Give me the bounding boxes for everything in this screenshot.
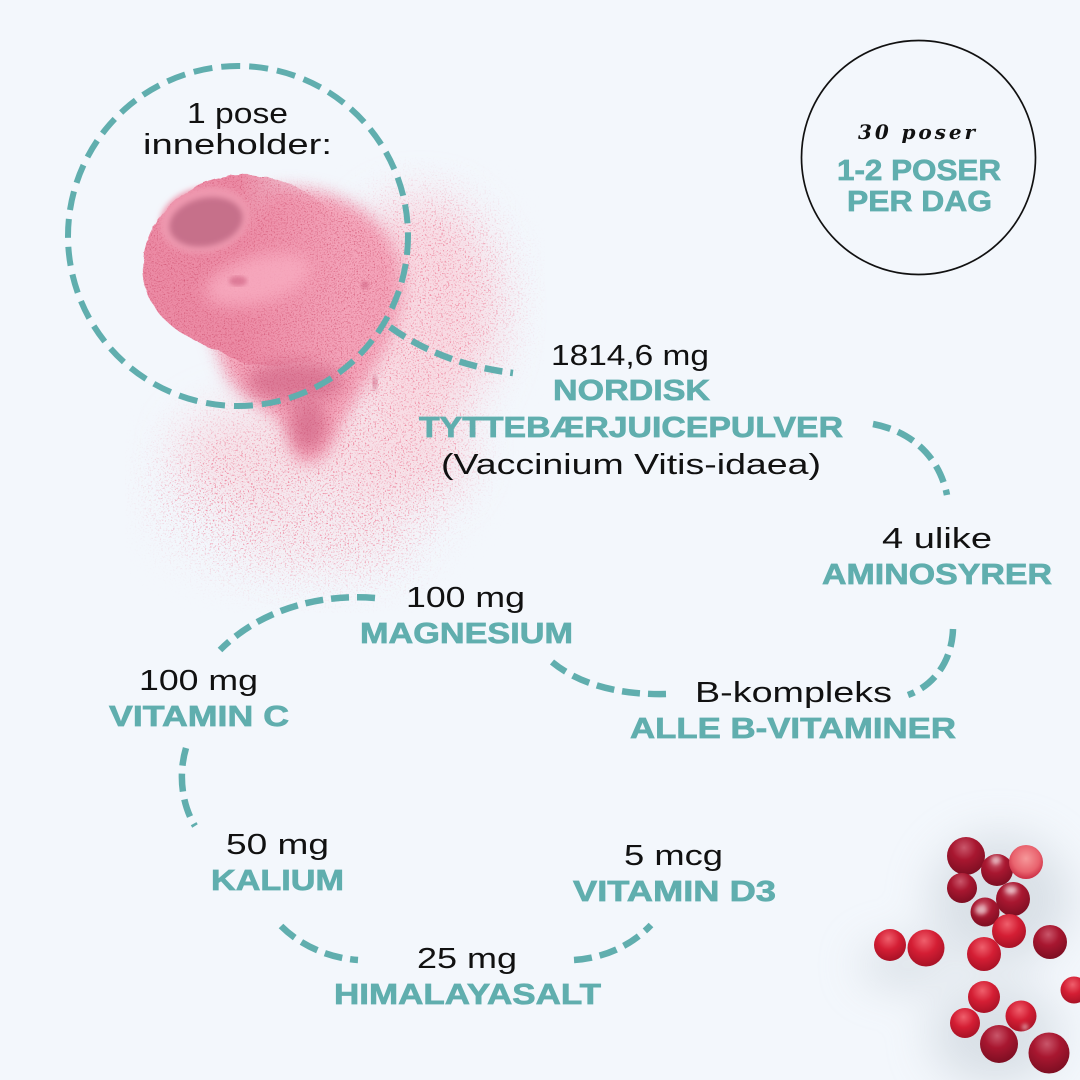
ingredient: potassium: KALIUM [211,865,344,897]
ingredient: magnesium [360,582,573,650]
lingonberries photo [860,835,1080,1080]
ingredient: magnesium: 100 mg [406,582,525,614]
arrow: B-complex to magnesium [552,662,666,694]
ingredient: himalayan salt: HIMALAYASALT [334,979,601,1011]
ingredient: vitamin D3: 5 mcg [624,840,723,872]
dosage badge: 1-2 POSER [837,155,1001,187]
ingredient: B vitamins: B-kompleks [695,677,892,709]
ingredient: lingonberry [419,340,843,481]
heading: 1 pose inneholder: inneholder: [143,129,332,161]
arrow: potassium to salt [281,926,358,960]
ingredient: B vitamins [630,677,956,745]
ingredient: vitamin D3 [573,840,776,908]
ingredient: potassium [211,829,344,897]
ingredient: lingonberry: 1814,6 mg [551,340,709,372]
ingredient: vitamin D3: VITAMIN D3 [573,876,776,908]
ingredient: vitamin C: 100 mg [139,665,258,697]
ingredient: amino acids: 4 ulike [882,523,992,555]
ingredient: potassium: 50 mg [226,829,329,861]
ingredient: himalayan salt [334,943,601,1011]
berry shadows [860,835,1070,1080]
arrow: magnesium to vitamin C [220,597,375,650]
powder scatter [160,195,510,575]
arrow: circle to lingonberry [390,327,513,373]
heading: 1 pose inneholder: 1 pose [187,98,288,130]
heading: 1 pose inneholder [143,98,332,161]
powder dark flecks [229,276,378,451]
berries [874,837,1080,1074]
powder haze [180,200,495,560]
powder image [143,175,510,575]
dashed circle [68,66,408,406]
ingredient: lingonberry: NORDISK [553,375,710,407]
ingredient: amino acids: AMINOSYRER [822,559,1052,591]
powder dense mound [143,175,350,365]
arrow: amino acids to B-complex [908,629,953,695]
berry highlights [975,856,1028,1030]
arrow: lingonberry to amino acids [873,424,947,495]
powder crater [153,178,257,262]
powder soft mound [200,189,402,463]
arrow: vitamin C to potassium [182,748,195,826]
dosage badge: PER DAG [847,186,992,218]
ingredient: vitamin C: VITAMIN C [109,701,289,733]
arrow: salt to vitamin D3 [574,925,651,960]
ingredient: B vitamins: ALLE B-VITAMINER [630,713,956,745]
ingredient: lingonberry: (Vaccinium Vitis-idaea) [441,449,821,481]
dosage badge [802,40,1036,274]
ingredient: lingonberry: TYTTEBÆRJUICEPULVER [419,412,843,444]
powder light highlight [199,243,317,317]
dosage badge: 30 poser [858,120,976,144]
ingredient: amino acids [822,523,1052,591]
ingredient: himalayan salt: 25 mg [417,943,517,975]
ingredient: magnesium: MAGNESIUM [360,618,573,650]
ingredient: vitamin C [109,665,289,733]
